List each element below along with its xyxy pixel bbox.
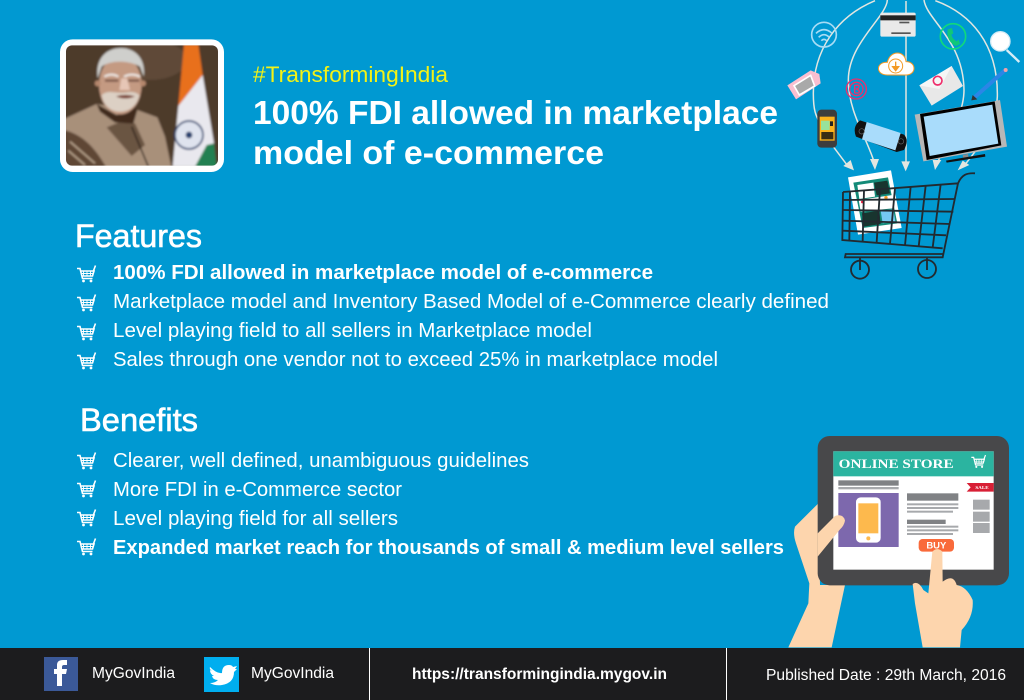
- title: 100% FDI allowed in marketplace: [253, 94, 778, 131]
- footer bar: [0, 648, 1024, 700]
- title: [253, 94, 778, 171]
- heading: Features: Features: [75, 218, 202, 254]
- list: features: Level playing field to all sellers in Marketplace model: [113, 320, 592, 342]
- store header: [833, 451, 994, 476]
- icon: cloud: [878, 53, 914, 75]
- icon: price tag: [787, 70, 821, 99]
- hashtag: #TransformingIndia: [253, 62, 449, 87]
- icon: bitcoin: [846, 79, 866, 99]
- portrait photo: [60, 39, 224, 172]
- facebook handle: MyGovIndia: [92, 665, 175, 682]
- sale ribbon: SALE: [975, 485, 989, 490]
- list: benefits: Clearer, well defined, unambiguous guidelines: [113, 450, 529, 472]
- list: benefits: More FDI in e-Commerce sector: [113, 479, 402, 501]
- icon: phone: [940, 24, 966, 49]
- title: model of e-commerce: [253, 134, 604, 171]
- icon: cart: [842, 173, 975, 279]
- screen: [833, 451, 994, 570]
- product panel: [838, 480, 899, 547]
- icon: monitor: [915, 100, 1007, 163]
- right hand: [913, 549, 973, 647]
- icon: magnifier: [991, 32, 1019, 62]
- illustration: hands holding tablet: [788, 436, 1009, 647]
- list: features: Sales through one vendor not to exceed 25% in marketplace model: [113, 349, 718, 371]
- left hand: [788, 503, 845, 647]
- list: features: [77, 262, 829, 371]
- curved arrows: [813, 0, 997, 167]
- list: features: 100% FDI allowed in marketplace model of e-commerce: [113, 262, 653, 284]
- store header: ONLINE STORE: [839, 456, 954, 471]
- sale ribbon: [967, 483, 994, 492]
- icon: tablet in cart: [848, 170, 902, 235]
- tablet body: [818, 436, 1009, 585]
- list: benefits: Expanded market reach for thousands of small & medium level sellers: [113, 537, 784, 559]
- website url: https://transformingindia.mygov.in: [412, 666, 667, 683]
- twitter handle: MyGovIndia: [251, 665, 334, 682]
- list: benefits: Level playing field for all sellers: [113, 508, 398, 530]
- icon: credit card: [880, 13, 916, 37]
- icon: smartphone: [817, 110, 837, 148]
- left thumb: [818, 515, 845, 557]
- icon: wifi: [812, 22, 836, 47]
- buy button: [919, 539, 954, 552]
- published date: Published Date : 29th March, 2016: [766, 667, 1006, 684]
- icon: pencil: [971, 68, 1008, 100]
- product details: [907, 493, 958, 535]
- thumbnails: [973, 500, 990, 533]
- heading: Benefits: Benefits: [80, 402, 198, 438]
- icon: game console: [855, 120, 907, 152]
- illustration: shopping cart with devices: [787, 0, 1019, 279]
- icon: twitter: [204, 657, 239, 692]
- icon: envelope: [919, 66, 963, 106]
- list: benefits: [77, 450, 784, 559]
- buy button: BUY: [926, 541, 946, 551]
- icon: facebook: [44, 657, 78, 691]
- list: features: Marketplace model and Inventory Based Model of e-Commerce clearly defined: [113, 291, 829, 313]
